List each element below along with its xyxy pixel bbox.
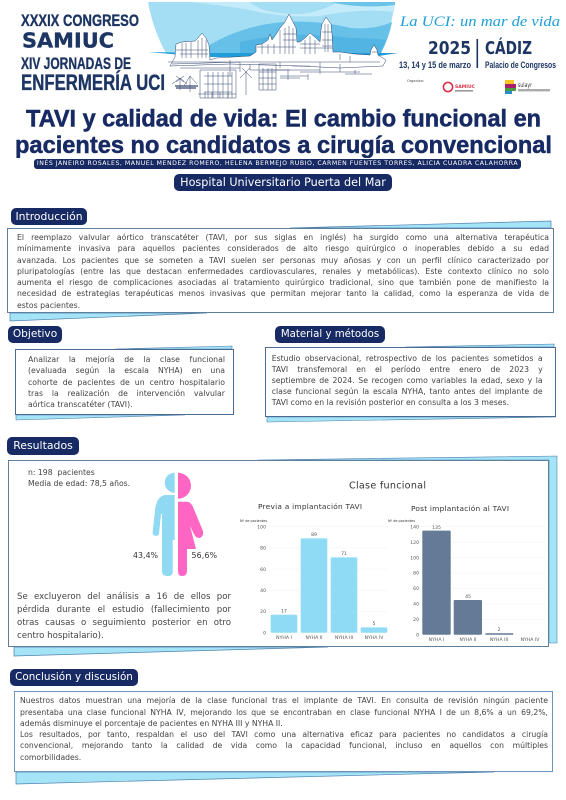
text: introducción: estos pacientes. [17,301,80,310]
text: conclusión: convencional, mejorando tanto la calidad de vida como la capacidad funcional, incluso en aquellos con múltiples [20,741,548,750]
header: organisers logos: Organiza: [407,79,424,83]
chart: post implantación al TAVI: 120 [410,540,419,546]
header: organisers logos [407,79,550,94]
authors [34,159,521,169]
header: organisers logos: SAMIUC [455,84,476,90]
label: female percent: 56,6% [192,551,217,560]
header: slogan: La UCI: un mar de vida [399,14,560,30]
header banner [20,2,560,98]
text: introducción: avanzada. Los pacientes que se someten a TAVI suelen ser personas muy añosas y con un perfil clínico caracterizado por [17,256,549,265]
chart: post implantación al TAVI: 40 [413,602,419,608]
text: exclusions: otras causas o seguimiento posterior en otro [17,618,231,628]
text: sample size and age [28,468,130,488]
chart: previa a implantación TAVI: 40 [260,588,266,594]
header: congress title: ENFERMERÍA UCI [21,70,165,95]
text: introducción: pluripatologías (entre las que destacan enfermedades cardiovasculares, renales y metabólicas). Este contexto clínico no solo [17,267,549,276]
text: material y métodos: clase funcional según la escala NYHA, tanto antes del implante de [272,387,543,396]
panel: introducción [7,220,554,322]
text: sample size and age: Media de edad: 78,5 años. [28,479,130,488]
chart: previa a implantación TAVI: NYHA II [305,635,323,641]
chart: post implantación al TAVI: Post implantación al TAVI [411,504,509,513]
text: objetivo: aórtica transcatéter (TAVI). [28,400,133,409]
text: conclusión: además disminuye el porcentaje de pacientes en NYHA III y NYHA II. [20,719,283,728]
text: sample size and age: n: 198 pacientes [28,468,95,477]
icon: female half [178,473,203,576]
text: material y métodos: Estudio observacional, retrospectivo de los pacientes sometidos a [272,354,543,362]
heading: Material y métodos: Material y métodos [281,329,379,340]
text: exclusions: Se excluyeron del análisis a 16 de ellos por [17,592,231,602]
chart: previa a implantación TAVI [240,502,388,641]
chart: post implantación al TAVI: 100 [410,555,419,561]
chart: post implantación al TAVI: Nº de pacientes [388,519,415,523]
text: conclusión: comorbilidades. [20,753,81,762]
chart: previa a implantación TAVI: 0 [263,630,266,636]
chart: previa a implantación TAVI: 5 [373,621,376,627]
chart: post implantación al TAVI: 2 [498,627,501,633]
chart: previa a implantación TAVI: 60 [260,567,266,573]
chart: post implantación al TAVI: 80 [413,571,419,577]
header: congress title: XXXIX CONGRESO [21,11,139,30]
text: conclusión: Nuestros datos muestran una mejoría de la clase funcional tras el implante de TAVI. En consulta de revisión ningún paciente [20,696,548,705]
chart: post implantación al TAVI: NYHA IV [521,637,540,643]
text: exclusions: centro hospitalario). [17,631,104,641]
heading: Conclusión y discusión: Conclusión y discusión [15,671,133,683]
chart: previa a implantación TAVI: 20 [260,609,266,615]
heading: Clase funcional: Clase funcional [349,480,426,492]
text: material y métodos: TAVI transfemoral en el período entre enero de 2023 y [272,365,543,374]
heading: Conclusión y discusión [10,669,138,686]
text: conclusión [20,696,548,762]
panel: objetivo [15,346,234,420]
text: material y métodos [272,354,543,407]
authors: INÉS JANEIRO ROSALES, MANUEL MENDEZ ROMERO, HELENA BERMEJO RUBIO, CARMEN FUENTES TORRES, ALICIA CUADRA CALAHORRA [37,160,518,167]
heading: Introducción: Introducción [15,210,83,223]
chart: sex distribution pictogram [133,472,217,576]
chart: post implantación al TAVI: 0 [416,632,419,638]
panel: material y métodos [265,344,556,422]
chart: post implantación al TAVI: NYHA I [429,637,444,643]
chart: previa a implantación TAVI: 100 [257,524,266,530]
icon: male half [153,473,175,576]
chart: post implantación al TAVI: 140 [410,524,419,530]
text: material y métodos: septiembre de 2024. Se recogen como variables la edad, sexo y la [272,376,543,385]
text: material y métodos: TAVI como en la revisión posterior en consulta a los 3 meses. [272,398,509,407]
chart: previa a implantación TAVI: 89 [311,532,317,538]
chart: post implantación al TAVI: 45 [465,594,471,600]
text: introducción: mínimamente invasiva para aquellos pacientes considerados de alto riesgo quirúrgico o inoperables debido a su edad [17,244,549,253]
text: exclusions [17,592,232,641]
heading: Resultados [7,437,79,455]
heading: Objetivo [8,326,62,343]
chart: previa a implantación TAVI: NYHA IV [365,635,384,641]
chart: post implantación al TAVI: 60 [413,586,419,592]
heading: Resultados: Resultados [13,439,73,452]
text: introducción: aumenta el riesgo de complicaciones asociadas al tratamiento quirúrgico tradicional, sino que también pone de manifiesto la [17,278,549,287]
header: date and venue: 13, 14 y 15 de marzo [399,60,471,71]
text: conclusión: Los resultados, por tanto, respaldan el uso del TAVI como una alternativa eficaz para pacientes no candidatos a cirugía [20,730,548,739]
heading: Introducción [11,208,87,225]
chart: post implantación al TAVI: 135 [432,525,441,531]
text: objetivo: (evaluada según la escala NYHA) en una [28,366,225,375]
header: congress title: SAMIUC [22,28,114,52]
text: conclusión: presentaba una clase funcional NYHA IV, mejorando los que se encontraban en clase funcional NYHA I de un 8,6% a un 69,2%, [20,708,548,717]
header: date and venue: CÁDIZ [485,37,532,59]
text: exclusions: pérdida durante el estudio (fallecimiento por [17,605,231,615]
label: male percent: 43,4% [133,551,158,560]
chart: previa a implantación TAVI: Nº de pacientes [240,519,267,523]
title [15,106,552,158]
chart: post implantación al TAVI [388,504,545,643]
header: sea and sky waves [148,2,398,57]
heading: Material y métodos [275,326,385,343]
chart: previa a implantación TAVI: NYHA III [335,635,353,641]
header: organisers logos: sulayr [518,82,532,89]
header: date and venue [399,37,556,71]
text: introducción: El reemplazo valvular aórtico transcatéter (TAVI, por sus siglas en inglés) ha surgido como una alternativa terapéutica [17,233,549,242]
chart: post implantación al TAVI: NYHA II [459,637,477,643]
chart: previa a implantación TAVI: Previa a implantación TAVI [258,502,362,511]
title: TAVI y calidad de vida: El cambio funcional en [26,106,541,133]
text: introducción: necesidad de estrategias terapéuticas menos invasivas que permitan mejorar tanto la calidad, como la esperanza de vida de [17,289,549,298]
chart: previa a implantación TAVI: 80 [260,546,266,552]
header: date and venue: 2025 [428,38,471,59]
text: introducción [17,233,549,310]
hospital: Hospital Universitario Puerta del Mar [180,176,386,189]
chart: previa a implantación TAVI: 71 [341,551,347,557]
text: objetivo [28,355,225,409]
text: objetivo: tras la realización de intervención valvular [28,389,225,398]
panel: conclusión y discusión [14,691,553,784]
chart: previa a implantación TAVI: 17 [281,608,287,614]
chart: previa a implantación TAVI: NYHA I [276,635,292,641]
heading: Objetivo: Objetivo [13,328,57,340]
header: congress title [21,11,165,95]
chart: post implantación al TAVI: NYHA III [490,637,508,643]
text: objetivo: Analizar la mejoría de la clase funcional [28,355,225,364]
text: objetivo: cohorte de pacientes de un centro hospitalario [28,378,225,386]
header: congress title: XIV JORNADAS DE [21,54,131,73]
chart: post implantación al TAVI: 20 [413,617,419,623]
header: Cádiz skyline sketch [168,14,386,98]
panel: resultados [8,456,558,656]
